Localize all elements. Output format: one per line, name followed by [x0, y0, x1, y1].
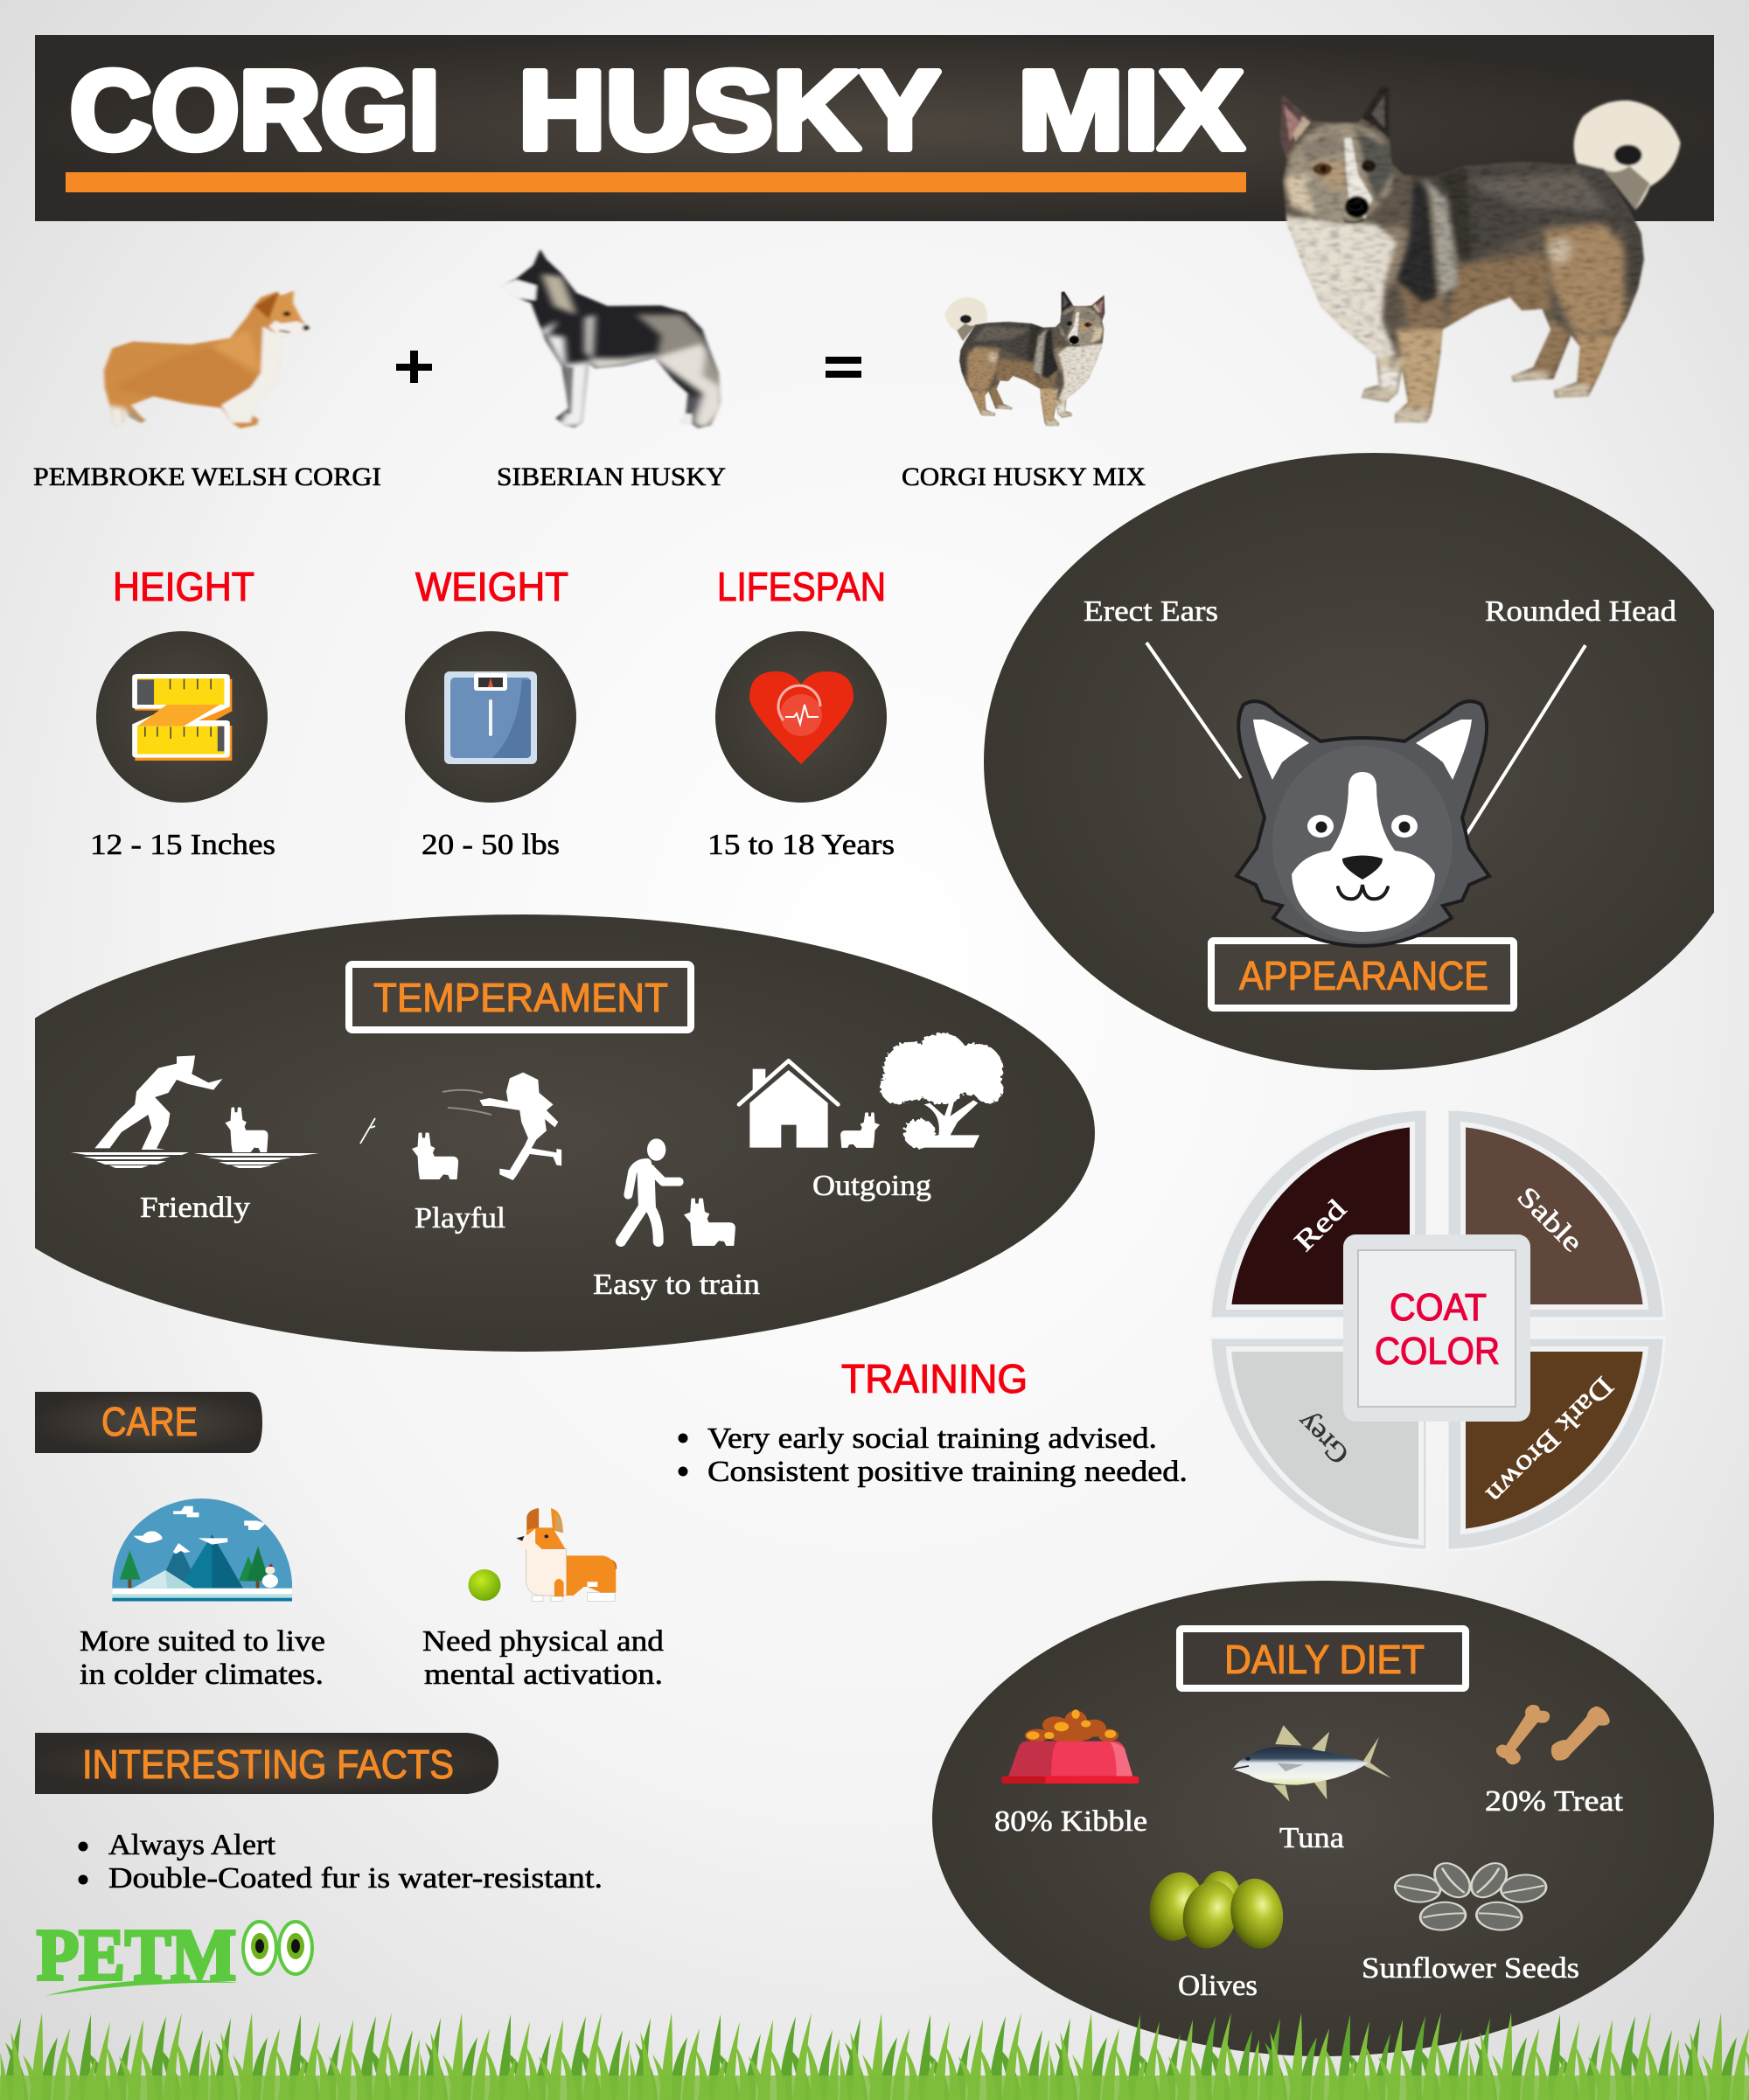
title	[70, 48, 1244, 173]
center label: COLOR	[1375, 1330, 1500, 1373]
item: sunflower seeds: Sunflower Seeds	[1362, 1952, 1579, 1985]
breed equation	[33, 245, 1146, 491]
item: olives: Olives	[1178, 1970, 1258, 2002]
heading: interesting facts	[35, 1733, 498, 1794]
labels: Red	[1287, 1193, 1352, 1257]
panel: training: Consistent positive training needed.	[707, 1456, 1188, 1488]
item: easy to train: Easy to train	[593, 1269, 760, 1301]
panel: care: mental activation.	[424, 1658, 663, 1691]
heading: interesting facts: INTERESTING FACTS	[82, 1742, 454, 1787]
pembroke welsh corgi	[33, 289, 381, 491]
stat: weight	[405, 564, 576, 861]
panel: interesting facts: Always Alert	[108, 1829, 276, 1861]
icon: heart	[749, 671, 854, 764]
quadrant: grey	[1229, 1349, 1421, 1542]
icon: cartoon corgi	[516, 1508, 617, 1602]
quadrant: red	[1229, 1124, 1412, 1307]
panel: care: in colder climates.	[80, 1658, 324, 1691]
heading: appearance	[1211, 941, 1514, 1008]
small corgi husky mix: CORGI HUSKY MIX	[902, 462, 1146, 491]
stat: lifespan: LIFESPAN	[717, 564, 886, 609]
panel: stats	[90, 564, 895, 861]
panel: interesting facts	[35, 1733, 603, 1895]
item: tuna	[1232, 1725, 1391, 1854]
stat: weight: WEIGHT	[415, 564, 568, 609]
labels	[1287, 1180, 1620, 1511]
item: sunflower seeds	[1362, 1860, 1579, 1985]
quadrant: sable	[1463, 1124, 1646, 1307]
logo: petmoo: PETM	[37, 1915, 236, 1996]
panel: care	[35, 1392, 664, 1691]
title: HUSKY	[519, 48, 940, 173]
icon: dog head	[1237, 701, 1489, 946]
panel: training	[679, 1356, 1188, 1488]
panel: daily diet	[932, 1581, 1714, 2056]
panel: training: TRAINING	[841, 1356, 1028, 1401]
item: friendly	[71, 1055, 319, 1224]
labels: Dark Brown	[1481, 1371, 1620, 1511]
stat: height: 12 - 15 Inches	[90, 829, 275, 861]
item: friendly: Friendly	[140, 1192, 250, 1224]
heading: daily diet: DAILY DIET	[1224, 1637, 1425, 1682]
quadrant: dark brown	[1463, 1349, 1646, 1532]
center label: COAT	[1390, 1286, 1487, 1329]
item: olives	[1145, 1870, 1286, 2002]
title banner	[35, 35, 1714, 221]
pembroke welsh corgi: PEMBROKE WELSH CORGI	[33, 462, 381, 491]
icon: scale	[444, 671, 537, 764]
labels: Grey	[1290, 1407, 1355, 1471]
heading: temperament: TEMPERAMENT	[373, 975, 668, 1020]
stat: lifespan	[707, 564, 895, 861]
stat: lifespan: 15 to 18 Years	[707, 829, 895, 861]
heading: daily diet	[1180, 1629, 1466, 1688]
label: erect ears: Erect Ears	[1084, 595, 1218, 628]
icon: tape measure	[132, 674, 232, 761]
title: CORGI	[70, 48, 440, 173]
item: outgoing: Outgoing	[812, 1170, 931, 1202]
chart: coat color wheel	[1210, 1109, 1664, 1550]
heading: appearance: APPEARANCE	[1239, 953, 1488, 998]
panel: training: Very early social training advised.	[707, 1422, 1157, 1455]
item: kibble bowl: 80% Kibble	[994, 1805, 1147, 1838]
item: playful: Playful	[415, 1202, 505, 1234]
stat: height	[90, 564, 275, 861]
stat: weight: 20 - 50 lbs	[422, 829, 560, 861]
pointer lines	[1146, 643, 1585, 836]
heading: temperament	[349, 964, 691, 1030]
equals sign	[826, 357, 861, 378]
panel: temperament	[0, 914, 1095, 1352]
large corgi husky mix photo	[1277, 85, 1681, 428]
title: MIX	[1018, 48, 1244, 173]
item: treat bones: 20% Treat	[1485, 1785, 1624, 1818]
quadrant rims	[1210, 1109, 1664, 1550]
panel: appearance	[984, 453, 1749, 1070]
item: outgoing	[739, 1033, 1003, 1202]
item: kibble bowl	[994, 1709, 1147, 1838]
small corgi husky mix	[902, 291, 1146, 491]
heading: care	[35, 1392, 262, 1453]
item: easy to train	[593, 1138, 760, 1301]
icon: snowy mountains	[110, 1498, 293, 1602]
plus sign	[396, 351, 432, 383]
heading: care: CARE	[101, 1399, 198, 1444]
siberian husky	[496, 245, 727, 491]
item: tuna: Tuna	[1279, 1822, 1344, 1854]
center label	[1343, 1234, 1530, 1422]
labels: Sable	[1511, 1180, 1589, 1258]
siberian husky: SIBERIAN HUSKY	[497, 462, 726, 491]
panel: care: Need physical and	[422, 1625, 664, 1658]
icon: tennis ball	[469, 1569, 500, 1601]
grass	[0, 2013, 1749, 2100]
item: playful	[360, 1073, 561, 1234]
panel: care: More suited to live	[80, 1625, 325, 1658]
item: treat bones	[1485, 1705, 1624, 1818]
panel: interesting facts: Double-Coated fur is water-resistant.	[108, 1862, 603, 1895]
stat: height: HEIGHT	[113, 564, 254, 609]
label: rounded head: Rounded Head	[1485, 595, 1676, 628]
